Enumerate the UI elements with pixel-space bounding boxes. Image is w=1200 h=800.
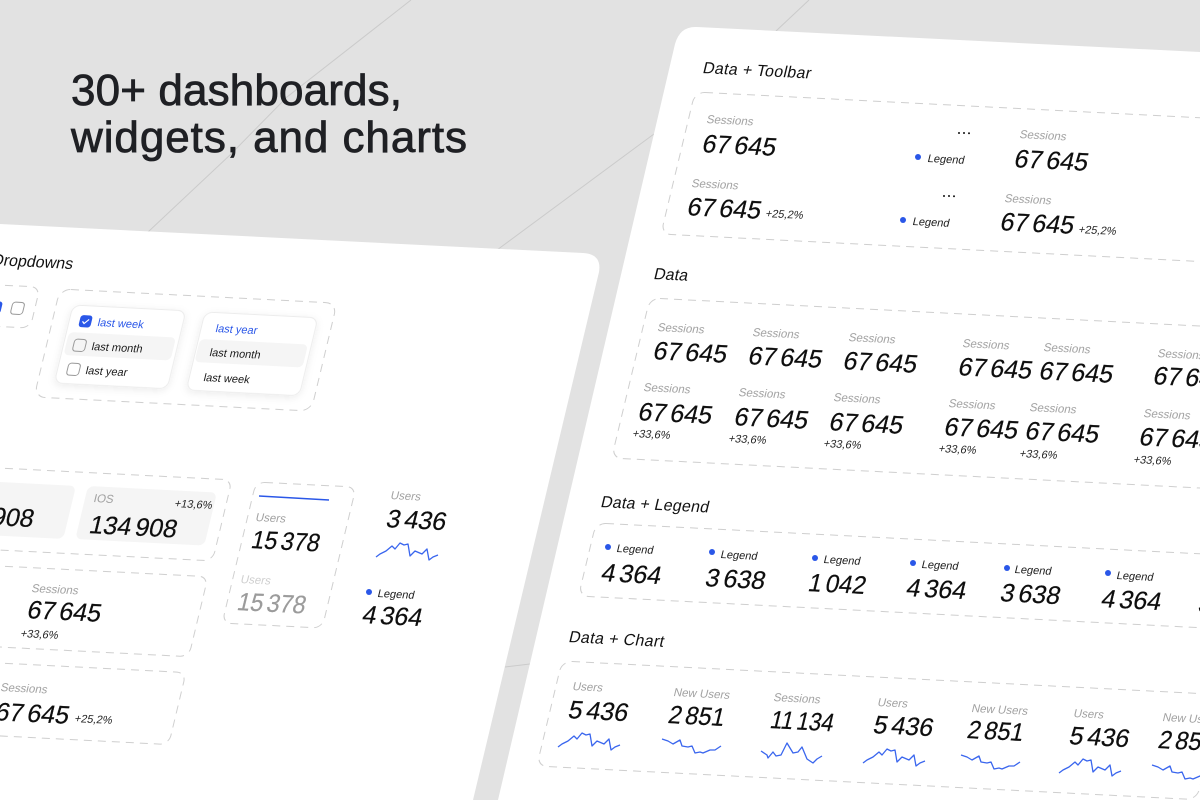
section: data: 67 645 xyxy=(746,342,826,374)
metric: users with sparkline: Users xyxy=(389,489,423,503)
section: data: Sessions xyxy=(751,326,801,341)
metric: new users: 2 851 xyxy=(965,716,1027,747)
section: data + toolbar: +25,2% xyxy=(764,208,805,222)
section: data: +33,6% xyxy=(1018,448,1059,462)
heading: data + chart: Data + Chart xyxy=(567,628,667,651)
section: data + toolbar: Sessions xyxy=(690,177,740,192)
title: widgets, and charts xyxy=(70,113,467,162)
section: data + toolbar: +25,2% xyxy=(1077,224,1118,238)
metric: new users xyxy=(1152,711,1200,779)
section: data + legend: 3 638 xyxy=(703,564,769,595)
section: data: Sessions xyxy=(642,381,692,396)
metric: users xyxy=(558,680,632,750)
metric: sessions: Sessions xyxy=(772,691,822,706)
metric: sessions xyxy=(761,691,837,763)
section: data + legend: 4 364 xyxy=(599,559,665,590)
tile group xyxy=(0,465,232,561)
section: data xyxy=(612,298,1200,499)
dropdown card with checkboxes: last week xyxy=(96,317,145,331)
metric: legend xyxy=(360,588,426,632)
section: data + legend: Legend xyxy=(719,549,759,563)
metric: users with sparkline: 3 436 xyxy=(384,505,450,536)
metric: users: Users xyxy=(571,680,605,694)
section: data: +33,6% xyxy=(1132,454,1173,468)
users tabs card: Users xyxy=(254,511,288,525)
section: data: 67 645 xyxy=(956,353,1036,385)
users tabs card: Users xyxy=(239,573,273,587)
metric: new users: New Users xyxy=(672,686,732,702)
section: data: Sessions xyxy=(947,397,997,412)
metric: sessions: 11 134 xyxy=(768,706,837,737)
section: data + toolbar: 67 645 xyxy=(1012,145,1092,177)
metric: users: 5 436 xyxy=(1067,722,1133,753)
dropdown card plain: last month xyxy=(208,347,262,362)
section: data + legend: 3 638 xyxy=(998,579,1064,610)
metric card with growth below: Sessions xyxy=(30,582,80,597)
section: data + toolbar: Sessions xyxy=(1018,128,1068,143)
section: data + legend: Legend xyxy=(920,559,960,573)
dropdown card with checkboxes: last month xyxy=(90,341,144,356)
section: data + toolbar: 67 645 xyxy=(998,208,1078,240)
section: data: 67 645 xyxy=(1037,357,1117,389)
section: data + toolbar: Legend xyxy=(926,153,966,167)
section: data + toolbar xyxy=(661,92,1200,275)
section: data: +33,6% xyxy=(937,443,978,457)
section: data: +33,6% xyxy=(727,433,768,447)
section: data + toolbar: Sessions xyxy=(705,113,755,128)
section: data + toolbar: Sessions xyxy=(1003,192,1053,207)
section: data: Sessions xyxy=(1028,401,1078,416)
tile: IOS: +13,6% xyxy=(173,498,214,512)
metric: users: Users xyxy=(1072,707,1106,721)
section: data: 67 645 xyxy=(1023,417,1103,449)
section: data + legend: Legend xyxy=(1115,570,1155,584)
metric card with growth below: +33,6% xyxy=(19,628,60,642)
metric: new users: 2 851 xyxy=(666,701,728,732)
metric: legend: 4 364 xyxy=(360,601,426,632)
panel: data variations xyxy=(498,27,1200,800)
metric: legend: Legend xyxy=(376,588,416,602)
dropdown card plain xyxy=(186,312,318,396)
section: data + toolbar: Legend xyxy=(911,216,951,230)
section: data + legend xyxy=(578,523,1200,637)
section: data + legend: 1 042 xyxy=(806,569,869,600)
metric card with growth beside: Sessions xyxy=(0,681,49,696)
title xyxy=(70,66,467,162)
dropdown card plain: last year xyxy=(214,323,259,337)
section: data + toolbar: 67 645 xyxy=(685,193,765,225)
section: data: Sessions xyxy=(1142,407,1192,422)
section: data + legend: 4 364 xyxy=(904,574,970,605)
metric: users: Users xyxy=(876,696,910,710)
section: data: 67 645 xyxy=(732,403,812,435)
tile: IOS xyxy=(75,486,217,546)
section: data: Sessions xyxy=(737,386,787,401)
metric card with growth beside xyxy=(0,660,186,745)
title: 30+ dashboards, xyxy=(71,66,402,115)
metric: new users: New Users xyxy=(970,702,1030,718)
section: data: 67 645 xyxy=(942,413,1022,445)
section: data: Sessions xyxy=(656,321,706,336)
checkbox group xyxy=(0,282,40,328)
section: data: +33,6% xyxy=(822,438,863,452)
heading: data + legend: Data + Legend xyxy=(599,493,711,516)
dropdown group xyxy=(34,289,337,411)
metric card with growth beside: +25,2% xyxy=(73,713,114,727)
section: data: +33,6% xyxy=(631,428,672,442)
metric card with growth below xyxy=(0,563,208,657)
section: data + legend: Legend xyxy=(1013,564,1053,578)
toolbar dots xyxy=(943,195,955,197)
metric: new users xyxy=(662,686,732,753)
metric card with growth below: 67 645 xyxy=(25,596,105,628)
heading: data: Data xyxy=(652,265,691,285)
section: data + chart xyxy=(537,661,1200,800)
section: data: Sessions xyxy=(847,331,897,346)
section: data: 67 645 xyxy=(636,398,716,430)
dropdown card with checkboxes: last year xyxy=(84,365,129,379)
metric: users xyxy=(863,696,937,766)
toolbar dots xyxy=(958,132,970,134)
section: data: Sessions xyxy=(832,391,882,406)
metric: users xyxy=(1059,707,1133,776)
section: data: 67 645 xyxy=(841,347,921,379)
metric: users with sparkline xyxy=(376,489,450,560)
tile: IOS: IOS xyxy=(92,492,115,506)
section: data + legend: Legend xyxy=(615,543,655,557)
section: data: Sessions xyxy=(1042,341,1092,356)
section: data: 67 645 xyxy=(827,408,907,440)
section: data + legend: 4 364 xyxy=(1099,585,1165,616)
section: data + legend: Legend xyxy=(822,554,862,568)
metric: users: 5 436 xyxy=(871,711,937,742)
users tabs card: 15 378 xyxy=(235,588,309,619)
section: data: Sessions xyxy=(961,337,1011,352)
dropdown card with checkboxes xyxy=(54,305,186,389)
section: data: 67 645 xyxy=(651,337,731,369)
metric: users: 5 436 xyxy=(566,696,632,727)
panel: dropdowns and metric widgets xyxy=(0,224,599,800)
metric: new users xyxy=(961,702,1030,769)
users tabs card xyxy=(222,482,356,628)
heading: data + toolbar: Data + Toolbar xyxy=(701,59,814,82)
dropdown card plain: last week xyxy=(202,372,251,386)
tile: IOS: 134 908 xyxy=(87,511,181,543)
section: data + toolbar: 67 645 xyxy=(700,130,780,162)
users tabs card: 15 378 xyxy=(249,526,323,557)
